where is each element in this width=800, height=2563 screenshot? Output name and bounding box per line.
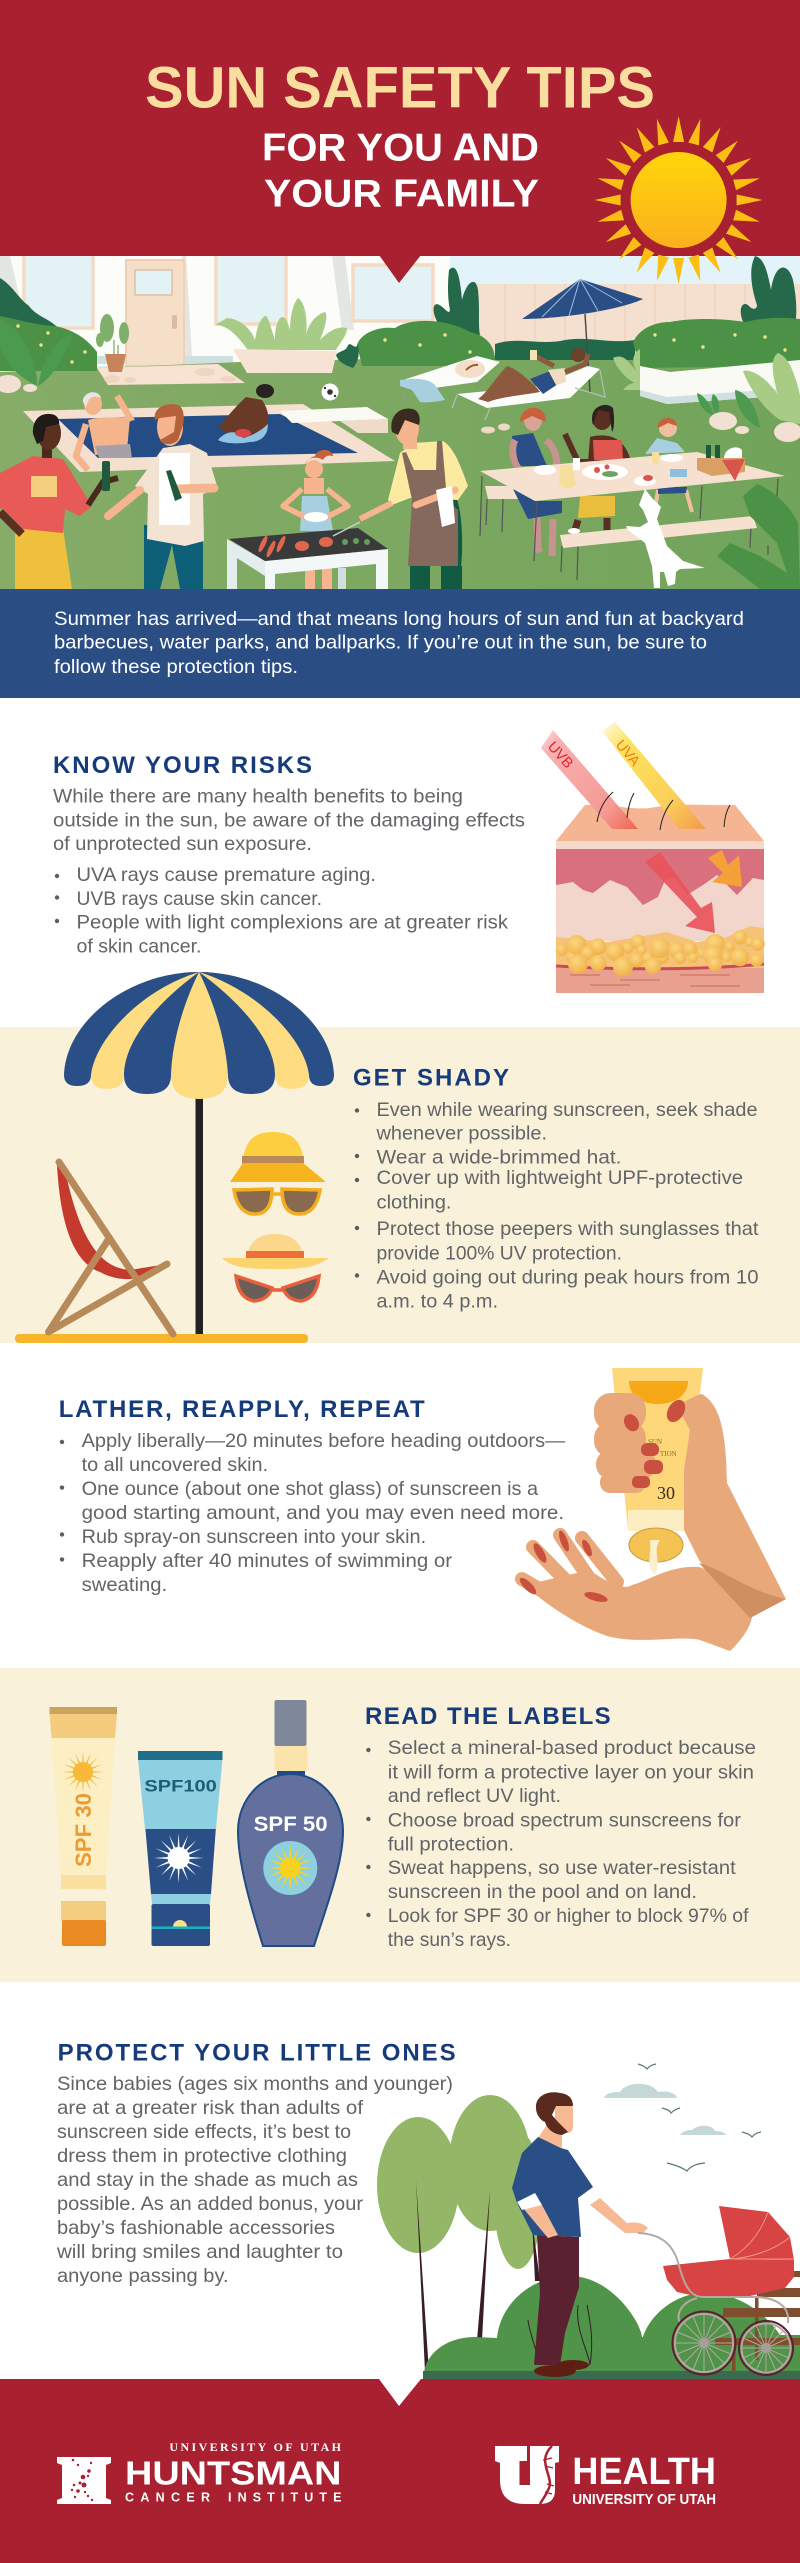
SPF 30 tube xyxy=(50,1707,117,1946)
low hedge xyxy=(495,339,635,360)
bottom right leaves xyxy=(717,484,800,589)
deck chair xyxy=(48,1162,173,1334)
section: read the labels panel xyxy=(0,1668,800,1982)
lawn xyxy=(0,356,800,589)
bullet list: full protection. xyxy=(388,1833,514,1855)
bullet list: Even while wearing sunscreen, seek shade xyxy=(376,1099,758,1121)
skin diagram xyxy=(541,722,765,993)
lather reapply repeat text xyxy=(59,1396,566,1596)
SPF100 label: SPF100 xyxy=(144,1776,217,1796)
girl with plate xyxy=(283,450,348,589)
heading: GET SHADY xyxy=(353,1065,509,1092)
ground strip xyxy=(423,2371,800,2379)
bullet list: clothing. xyxy=(376,1191,452,1213)
hedges xyxy=(0,316,800,371)
dark shrub left xyxy=(0,278,56,326)
lower hand xyxy=(517,1529,752,1651)
U mark xyxy=(495,2446,559,2504)
door xyxy=(126,260,184,366)
bench xyxy=(715,2271,800,2372)
paragraph: sunscreen side effects, it’s best to xyxy=(57,2121,351,2143)
swimmer in pool xyxy=(218,384,274,443)
intro band xyxy=(0,589,800,698)
stepping stones xyxy=(481,424,510,434)
paragraph: and stay in the shade as much as xyxy=(57,2169,358,2191)
lounge chair xyxy=(452,366,605,420)
subtitle xyxy=(262,127,539,216)
table items xyxy=(534,445,745,488)
spokes xyxy=(675,2314,791,2373)
tree trunks xyxy=(416,2180,540,2372)
sunbather xyxy=(478,348,588,402)
backyard party scene xyxy=(0,250,800,589)
stroller xyxy=(638,2206,794,2375)
bullet list: good starting amount, and you may even need more. xyxy=(82,1502,564,1524)
bullet list: People with light complexions are at greater risk xyxy=(76,911,508,933)
woman in blue dress xyxy=(512,408,562,556)
intro text: of unprotected sun exposure. xyxy=(53,833,312,855)
sunscreen tube: TION xyxy=(660,1450,677,1458)
intro band: follow these protection tips. xyxy=(54,656,298,678)
bullet list xyxy=(55,864,508,958)
university of utah: UNIVERSITY OF UTAH xyxy=(169,2440,342,2454)
basket xyxy=(663,2259,794,2297)
bullet list: One ounce (about one shot glass) of sunscreen is a xyxy=(82,1478,538,1500)
windows xyxy=(24,250,433,328)
rocks right xyxy=(709,412,800,442)
intro band: Summer has arrived—and that means long hours of sun and fun at backyard xyxy=(54,608,744,630)
grill xyxy=(227,522,388,589)
bullet list: UVA rays cause premature aging. xyxy=(76,864,376,886)
icon: sun hat xyxy=(222,1234,329,1269)
sun on SPF 100 xyxy=(154,1833,204,1883)
section: know your risks xyxy=(53,752,525,958)
umbrella pole xyxy=(196,1095,203,1335)
intro band: barbecues, water parks, and ballparks. If you’re out in the sun, be sure to xyxy=(54,632,707,654)
cacti xyxy=(434,256,796,335)
hood ribs xyxy=(730,2212,794,2259)
umbrella canopy xyxy=(64,972,334,1099)
diving deck xyxy=(280,407,388,433)
subtitle: FOR YOU AND xyxy=(262,127,539,170)
hood xyxy=(719,2206,794,2260)
bullet list: the sun’s rays. xyxy=(388,1929,511,1951)
parasol xyxy=(522,279,643,393)
sun on SPF 30 xyxy=(62,1751,104,1793)
umbrella xyxy=(15,972,334,1343)
heading: LATHER, REAPPLY, REPEAT xyxy=(59,1396,425,1423)
Huntsman logo xyxy=(57,2440,342,2505)
paragraph: Since babies (ages six months and younger) xyxy=(57,2073,453,2095)
university of utah: UNIVERSITY OF UTAH xyxy=(572,2492,716,2508)
bullet list: a.m. to 4 p.m. xyxy=(376,1290,498,1312)
icon: yellow sunglasses xyxy=(234,1189,320,1214)
hedge flowers xyxy=(16,324,787,364)
birds xyxy=(638,2064,761,2171)
bullet list: Look for SPF 30 or higher to block 97% of xyxy=(388,1905,749,1927)
bullet list: Sweat happens, so use water-resistant xyxy=(388,1857,736,1879)
small dark leaves xyxy=(697,390,760,428)
icon: sun xyxy=(595,116,763,284)
paragraph: possible. As an added bonus, your xyxy=(57,2193,364,2215)
intro text: While there are many health benefits to being xyxy=(53,785,463,807)
bullet list xyxy=(366,1737,756,1951)
picnic table xyxy=(480,452,785,561)
intro text: outside in the sun, be aware of the damaging effects xyxy=(53,810,525,832)
UVA arrow xyxy=(708,850,742,887)
bullet list: UVB rays cause skin cancer. xyxy=(76,888,322,910)
icon: red sunglasses xyxy=(236,1276,319,1301)
hairs xyxy=(597,792,730,830)
bullet list: of skin cancer. xyxy=(76,936,202,958)
sunscreen tube: SUN xyxy=(648,1438,662,1446)
title: SUN SAFETY TIPS xyxy=(145,56,655,121)
potted plant xyxy=(96,314,129,372)
skin top surface xyxy=(556,805,764,841)
upper arm xyxy=(676,1394,786,1618)
trees xyxy=(377,2095,542,2269)
UVB arrow xyxy=(645,852,715,933)
intro text xyxy=(53,785,525,855)
read the labels text xyxy=(365,1703,756,1951)
SPF 50 bottle xyxy=(238,1700,343,1946)
get shady text xyxy=(353,1065,759,1312)
pants xyxy=(534,2235,579,2365)
subtitle: YOUR FAMILY xyxy=(264,173,539,216)
planter xyxy=(215,298,347,373)
white planter xyxy=(640,360,800,404)
griller xyxy=(360,408,468,589)
SPF 30 label: SPF 30 xyxy=(71,1793,96,1867)
paragraph: are at a greater risk than adults of xyxy=(57,2097,364,2119)
UVB ray xyxy=(541,730,638,829)
forearm xyxy=(523,2205,558,2238)
arm xyxy=(590,2198,648,2233)
hands with sunscreen tube xyxy=(517,1368,786,1651)
fence xyxy=(477,284,800,354)
father xyxy=(512,2092,648,2377)
bullet list: to all uncovered skin. xyxy=(82,1454,268,1476)
pool deck xyxy=(23,404,395,472)
icon: yellow hat xyxy=(230,1132,326,1182)
park scene with father and stroller xyxy=(377,2064,800,2379)
heading: PROTECT YOUR LITTLE ONES xyxy=(58,2040,456,2067)
hubs xyxy=(699,2338,771,2353)
boy xyxy=(645,418,692,512)
bullet list: it will form a protective layer on your skin xyxy=(388,1761,754,1783)
sunscreen tube xyxy=(612,1368,703,1575)
back bench xyxy=(485,486,518,532)
light leaves near fence xyxy=(613,349,640,390)
header banner xyxy=(0,0,800,283)
footer band xyxy=(0,2379,800,2563)
soccer ball xyxy=(322,384,338,400)
clouds xyxy=(604,2084,726,2135)
ground bar xyxy=(15,1334,308,1343)
paragraph: will bring smiles and laughter to xyxy=(56,2241,343,2263)
bullet list: Rub spray-on sunscreen into your skin. xyxy=(82,1526,426,1548)
man with beard xyxy=(108,404,218,589)
UVA label: UVA xyxy=(612,737,643,770)
white dog xyxy=(626,489,705,588)
bullet list: Reapply after 40 minutes of swimming or xyxy=(82,1550,453,1572)
nails xyxy=(621,1397,689,1488)
handle xyxy=(638,2233,788,2323)
bullet list: provide 100% UV protection. xyxy=(376,1242,622,1264)
bullet list: Wear a wide-brimmed hat. xyxy=(376,1146,622,1168)
hair and beard xyxy=(536,2092,573,2135)
paragraph: dress them in protective clothing xyxy=(57,2145,347,2167)
pool water xyxy=(58,414,358,458)
shoes xyxy=(534,2360,589,2377)
H mark xyxy=(57,2457,111,2504)
section: get shady panel xyxy=(0,1027,800,1343)
bullet list: and reflect UV light. xyxy=(388,1785,561,1807)
health wordmark: HEALTH xyxy=(572,2451,716,2493)
bullet list: sweating. xyxy=(82,1574,167,1596)
cancer institute: INSTITUTE xyxy=(228,2491,342,2505)
paragraph: anyone passing by. xyxy=(57,2265,229,2287)
sleeve xyxy=(517,2193,542,2210)
bullet list: Apply liberally—20 minutes before heading outdoors— xyxy=(82,1430,566,1452)
bullet list: whenever possible. xyxy=(375,1122,547,1144)
large leaves left xyxy=(0,319,72,386)
patio xyxy=(97,364,245,385)
cancer institute: CANCER xyxy=(125,2491,210,2505)
rocks left xyxy=(0,375,37,393)
woman in red top xyxy=(565,405,632,534)
bullet list: sunscreen in the pool and on land. xyxy=(388,1881,697,1903)
swimmer old man xyxy=(76,392,132,470)
sun badge xyxy=(263,1841,317,1895)
front bench xyxy=(560,516,768,580)
University of Utah Health logo xyxy=(495,2446,716,2508)
UVB label: UVB xyxy=(544,739,576,772)
SPF 50 label: SPF 50 xyxy=(254,1813,328,1836)
wheels xyxy=(672,2312,793,2375)
bushes xyxy=(424,2276,800,2372)
paragraph xyxy=(56,2073,453,2287)
skin layers xyxy=(556,841,764,993)
sunscreen tube: 30 xyxy=(657,1483,675,1503)
fingers xyxy=(594,1393,656,1493)
face xyxy=(555,2103,573,2133)
SPF 100 tube xyxy=(138,1751,222,1946)
bullet list xyxy=(60,1430,566,1596)
heading: KNOW YOUR RISKS xyxy=(53,752,312,779)
heading: READ THE LABELS xyxy=(365,1703,611,1730)
cancer institute xyxy=(125,2491,342,2505)
bullet list: Protect those peepers with sunglasses that xyxy=(376,1218,759,1240)
man in red shirt xyxy=(0,414,118,589)
bullet list xyxy=(355,1099,759,1312)
right light leaves xyxy=(743,353,800,424)
blue shirt xyxy=(512,2137,593,2237)
neck xyxy=(538,2123,562,2148)
UVA ray xyxy=(602,722,706,829)
bullet list: Choose broad spectrum sunscreens for xyxy=(388,1809,742,1831)
bullet list: Avoid going out during peak hours from 10 xyxy=(376,1266,759,1288)
huntsman wordmark: HUNTSMAN xyxy=(125,2456,342,2493)
paragraph: baby’s fashionable accessories xyxy=(57,2217,335,2239)
bullet list: Select a mineral-based product because xyxy=(388,1737,756,1759)
fat cells xyxy=(556,930,765,977)
protect your little ones text xyxy=(56,2040,456,2287)
house wall xyxy=(0,256,452,366)
bullet list: Cover up with lightweight UPF-protective xyxy=(376,1167,743,1189)
small dark plant xyxy=(336,344,359,368)
bush twigs xyxy=(528,2305,592,2365)
lounge chair with hat and towel xyxy=(400,356,500,403)
